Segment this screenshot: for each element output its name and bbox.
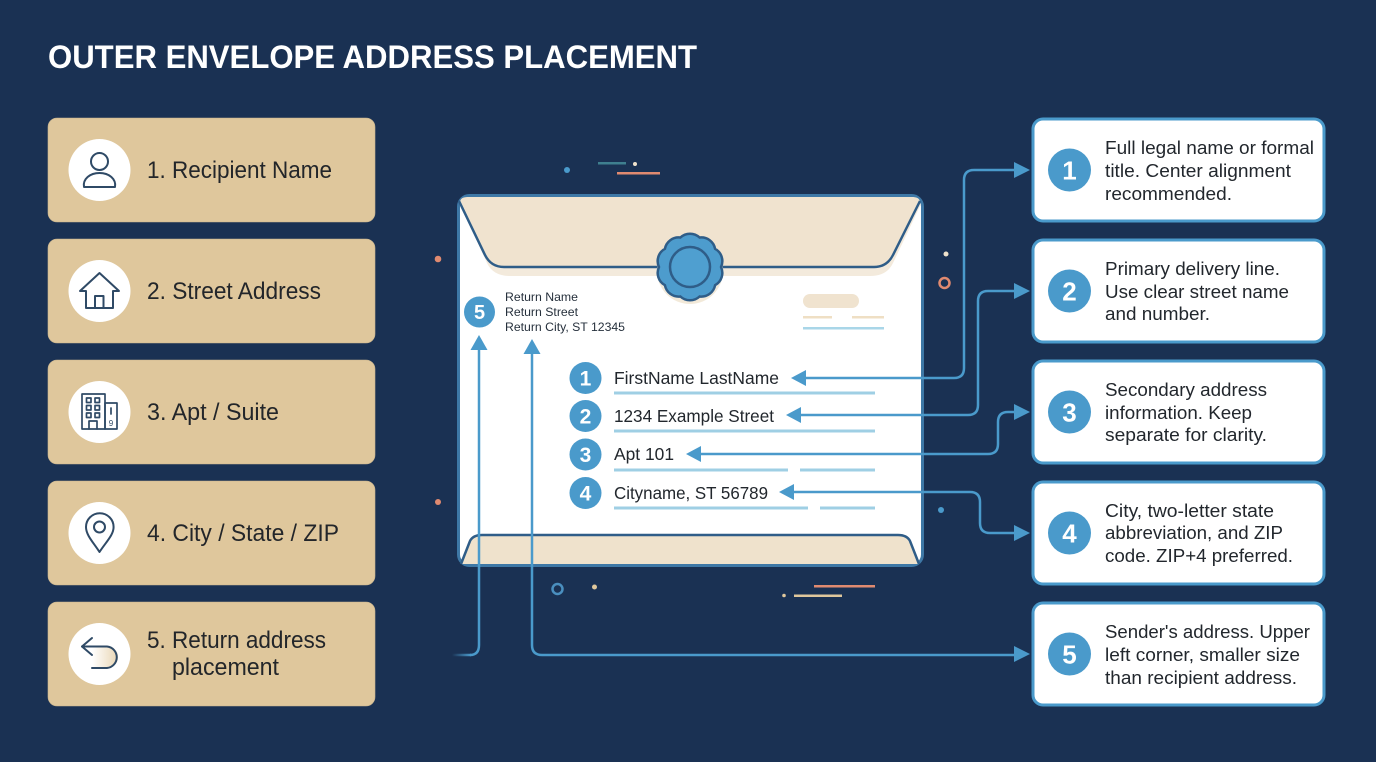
return address block: Return Name (505, 290, 578, 304)
icon: return arrow (82, 638, 118, 668)
card: apt / suite: 3. Apt / Suite (147, 399, 279, 426)
note 4 (1033, 482, 1324, 584)
recipient line 2: 1234 Example Street (614, 406, 774, 426)
card: return address: placement (172, 654, 279, 681)
note 3: 3 (1062, 398, 1077, 428)
note 4: City, two-letter state (1105, 500, 1274, 521)
note 4: abbreviation, and ZIP (1105, 522, 1283, 543)
note 1: Full legal name or formal (1105, 137, 1314, 158)
note 3 (1033, 361, 1324, 463)
card: recipient name (48, 118, 375, 222)
recipient line 2: 2 (580, 406, 591, 428)
title: OUTER ENVELOPE ADDRESS PLACEMENT (48, 39, 697, 75)
recipient line 3 (570, 438, 875, 470)
return address block: Return Street (505, 305, 579, 319)
note 1: recommended. (1105, 183, 1232, 204)
envelope body (458, 196, 922, 566)
card: apt / suite (48, 360, 375, 464)
recipient line 3: Apt 101 (614, 444, 674, 464)
arrow: return address to note 5 (524, 339, 1030, 662)
card: city / state / zip: 4. City / State / ZIP (147, 520, 339, 547)
note 5: than recipient address. (1105, 667, 1297, 688)
icon: map pin (86, 513, 114, 552)
note 3: information. Keep (1105, 402, 1252, 423)
card: street address: 2. Street Address (147, 278, 321, 305)
arrow: line 4 to note 4 (779, 484, 1030, 541)
note 2: 2 (1062, 276, 1077, 306)
card: street address (48, 239, 375, 343)
recipient line 1: 1 (580, 368, 592, 390)
envelope top flap (459, 197, 921, 276)
arrow: line 2 to note 2 (786, 283, 1030, 423)
note 5: Sender's address. Upper (1105, 621, 1310, 642)
card: return address: 5. Return address (147, 627, 326, 654)
note 1 (1033, 119, 1324, 221)
recipient line 2 (570, 400, 875, 432)
icon: person (84, 153, 115, 187)
note 1: title. Center alignment (1105, 160, 1291, 181)
return address block (464, 290, 625, 334)
stamp placeholder (803, 294, 884, 330)
recipient line 3: 3 (580, 444, 591, 467)
wax seal (657, 234, 723, 304)
note 4: 4 (1062, 518, 1077, 548)
return address block: Return City, ST 12345 (505, 320, 625, 334)
recipient line 4 (570, 477, 875, 509)
card: recipient name: 1. Recipient Name (147, 157, 332, 184)
arrow: return card to return badge (452, 335, 488, 655)
arrow: line 3 to note 3 (686, 404, 1030, 462)
panel: explanatory notes (1033, 119, 1324, 705)
envelope (458, 196, 922, 566)
card: return address (48, 602, 375, 706)
note 2: Use clear street name (1105, 281, 1289, 302)
icon: house (80, 273, 119, 308)
recipient line 4: 4 (580, 482, 592, 506)
note 3: separate for clarity. (1105, 424, 1267, 445)
return address block: 5 (474, 302, 485, 324)
recipient line 4: Cityname, ST 56789 (614, 483, 768, 503)
note 1: 1 (1062, 156, 1077, 186)
icon: building (82, 394, 117, 429)
note 5: left corner, smaller size (1105, 644, 1300, 665)
note 4: code. ZIP+4 preferred. (1105, 545, 1293, 566)
recipient line 1: FirstName LastName (614, 368, 779, 388)
card: city / state / zip (48, 481, 375, 585)
note 5 (1033, 603, 1324, 705)
note 3: Secondary address (1105, 379, 1267, 400)
note 2: and number. (1105, 303, 1210, 324)
note 5: 5 (1062, 640, 1077, 670)
recipient line 1 (570, 362, 875, 394)
arrow: line 1 to note 1 (791, 162, 1030, 386)
panel: address component list (48, 118, 375, 706)
icon: building: 9 (109, 419, 114, 428)
note 2 (1033, 240, 1324, 342)
note 2: Primary delivery line. (1105, 258, 1280, 279)
decorative accents (435, 162, 950, 597)
envelope bottom flap (461, 535, 919, 564)
